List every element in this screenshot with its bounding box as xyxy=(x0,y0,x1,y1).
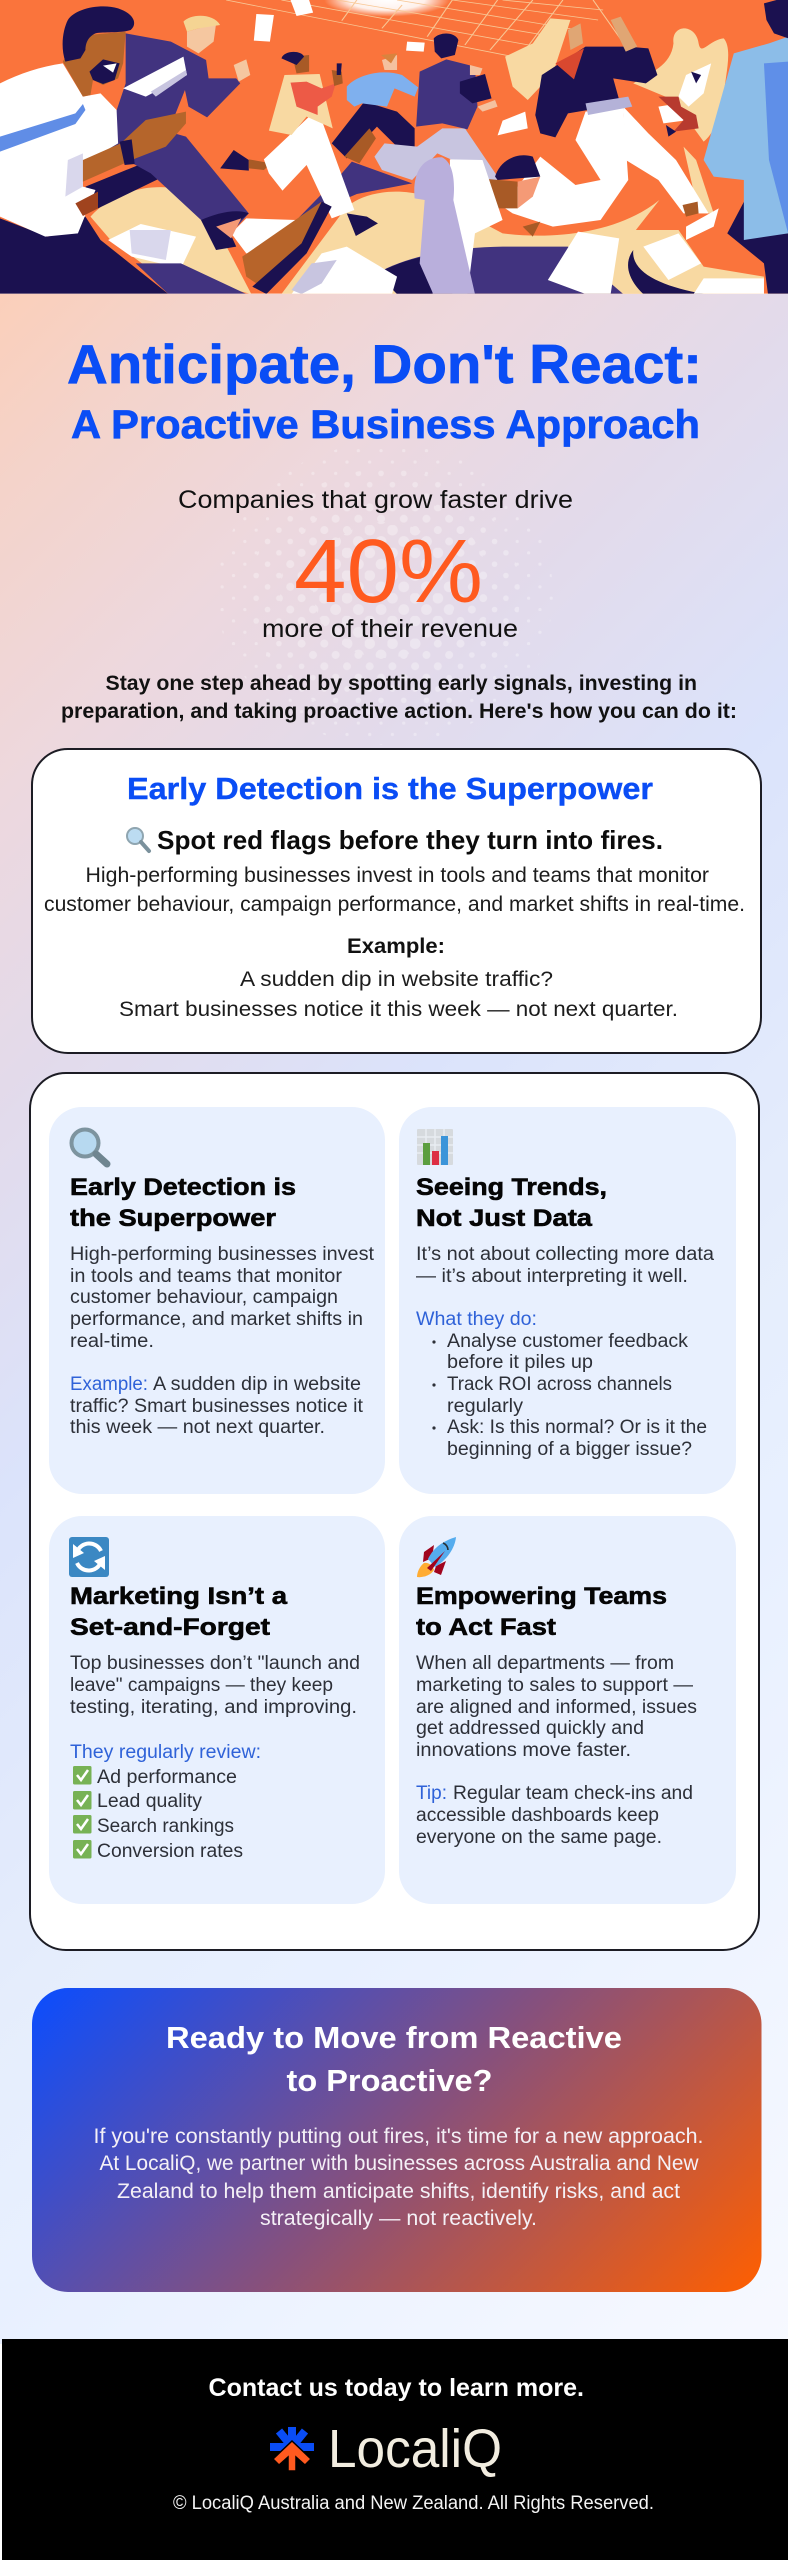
card text: real-time. xyxy=(70,1331,154,1352)
card text xyxy=(70,1653,360,1763)
card text: in tools and teams that monitor xyxy=(70,1266,343,1287)
white big shoe / lavender sole xyxy=(450,159,503,294)
intro text: preparation, and taking proactive action. Here's how you can do it: xyxy=(61,700,737,723)
bullet list: beginning of a bigger issue? xyxy=(447,1439,692,1460)
copyright: © LocaliQ Australia and New Zealand. All Rights Reserved. xyxy=(173,2493,654,2514)
card text: testing, iterating, and improving. xyxy=(70,1697,357,1718)
example xyxy=(119,935,678,1021)
logo: LocaliQ: LocaliQ xyxy=(328,2419,502,2479)
card text: performance, and market shifts in xyxy=(70,1309,363,1330)
icon: refresh arrows xyxy=(69,1537,109,1577)
card text: Tip: xyxy=(416,1783,447,1804)
card text: — it’s about interpreting it well. xyxy=(416,1266,688,1287)
card heading: Seeing Trends, xyxy=(416,1174,607,1201)
title xyxy=(67,333,702,447)
checklist: Conversion rates xyxy=(97,1841,243,1862)
card text: marketing to sales to support — xyxy=(416,1675,693,1696)
bullet list: Analyse customer feedback xyxy=(447,1331,689,1352)
card text: Regular team check-ins and xyxy=(453,1783,693,1804)
hero illustration: office workers running xyxy=(0,0,788,294)
card text: customer behaviour, campaign xyxy=(70,1287,338,1308)
card text: A sudden dip in website xyxy=(153,1374,361,1395)
card text xyxy=(70,1244,375,1438)
panel: call to action xyxy=(32,1988,762,2292)
contact line: Contact us today to learn more. xyxy=(208,2374,584,2402)
card text xyxy=(416,1653,697,1848)
intro text xyxy=(61,672,737,723)
card text: They regularly review: xyxy=(70,1742,261,1763)
card text xyxy=(416,1244,714,1330)
panel heading: Early Detection is the Superpower xyxy=(127,771,653,806)
call to action text: Zealand to help them anticipate shifts, identify risks, and act xyxy=(117,2180,680,2203)
sub heading: Spot red flags before they turn into fires. xyxy=(157,825,663,855)
card text: Top businesses don’t "launch and xyxy=(70,1653,360,1674)
blond woman xyxy=(505,18,570,100)
footer xyxy=(2,2339,788,2560)
statistic: 40% of revenue: 40% xyxy=(294,522,483,622)
example: Example: xyxy=(347,935,445,958)
card heading xyxy=(416,1583,667,1641)
checklist: Ad performance xyxy=(97,1767,237,1788)
panel: four proactive habits xyxy=(30,1073,759,1950)
runner blue top xyxy=(332,102,415,158)
far figure xyxy=(633,28,728,142)
card text: innovations move faster. xyxy=(416,1740,631,1761)
card: early detection xyxy=(49,1107,385,1494)
bullet list: Track ROI across channels xyxy=(447,1374,672,1395)
call to action text: If you're constantly putting out fires, it's time for a new approach. xyxy=(94,2125,704,2148)
man in white shirt xyxy=(0,217,168,294)
bullet list xyxy=(432,1331,707,1460)
card heading xyxy=(70,1583,287,1641)
card text: When all departments — from xyxy=(416,1653,674,1674)
man purple suit xyxy=(86,166,158,208)
right person in blue coat xyxy=(727,200,788,294)
example: A sudden dip in website traffic? xyxy=(240,968,553,991)
brown shoe xyxy=(242,202,328,283)
card text: High-performing businesses invest xyxy=(70,1244,375,1265)
icon: bar chart xyxy=(417,1129,453,1165)
card heading: Set-and-Forget xyxy=(70,1614,270,1641)
man with briefcase xyxy=(374,128,497,180)
bullet list: Ask: Is this normal? Or is it the xyxy=(447,1417,707,1438)
statistic: 40% of revenue xyxy=(178,486,573,643)
card heading: Empowering Teams xyxy=(416,1583,667,1610)
card heading: Not Just Data xyxy=(416,1205,592,1232)
panel: early detection summary xyxy=(32,749,761,1053)
card heading xyxy=(70,1174,296,1232)
card text: It’s not about collecting more data xyxy=(416,1244,714,1265)
card text: get addressed quickly and xyxy=(416,1718,644,1739)
card heading: Marketing Isn’t a xyxy=(70,1583,287,1610)
card: seeing trends xyxy=(399,1107,736,1494)
checklist: Lead quality xyxy=(97,1791,203,1812)
statistic: 40% of revenue: more of their revenue xyxy=(262,615,518,643)
call to action text: strategically — not reactively. xyxy=(260,2207,537,2230)
icon: rocket xyxy=(417,1537,456,1577)
example: Smart businesses notice it this week — not next quarter. xyxy=(119,998,678,1021)
card text: What they do: xyxy=(416,1309,537,1330)
card text: this week — not next quarter. xyxy=(70,1417,325,1438)
card: marketing xyxy=(49,1516,385,1904)
call to action heading: Ready to Move from Reactive xyxy=(166,2020,622,2055)
description xyxy=(44,864,745,916)
call to action text xyxy=(94,2125,704,2230)
call to action heading xyxy=(166,2020,622,2098)
card heading: the Superpower xyxy=(70,1205,277,1232)
card text: are aligned and informed, issues xyxy=(416,1697,697,1718)
icon: magnifying glass xyxy=(127,828,149,851)
card heading xyxy=(416,1174,607,1232)
halftone dot burst xyxy=(217,443,553,745)
floor shapes xyxy=(297,162,412,220)
card heading: to Act Fast xyxy=(416,1614,556,1641)
card text: leave" campaigns — they keep xyxy=(70,1675,333,1696)
checklist xyxy=(73,1766,243,1862)
bullet list: regularly xyxy=(447,1396,524,1417)
card text: Example: xyxy=(70,1374,148,1395)
checklist: Search rankings xyxy=(97,1816,234,1837)
card text: accessible dashboards keep xyxy=(416,1805,659,1826)
bullet list: before it piles up xyxy=(447,1352,593,1373)
call to action text: At LocaliQ, we partner with businesses across Australia and New xyxy=(100,2152,699,2175)
description: High-performing businesses invest in tools and teams that monitor xyxy=(86,864,709,887)
statistic: 40% of revenue: Companies that grow faster drive xyxy=(178,486,573,514)
title: A Proactive Business Approach xyxy=(71,403,700,447)
call to action heading: to Proactive? xyxy=(286,2063,492,2098)
card: empowering teams xyxy=(399,1516,736,1904)
title: Anticipate, Don't React: xyxy=(67,333,702,395)
woman with bag xyxy=(220,150,378,236)
description: customer behaviour, campaign performance, and market shifts in real-time. xyxy=(44,893,745,916)
icon: magnifying glass xyxy=(72,1130,107,1164)
card heading: Early Detection is xyxy=(70,1174,296,1201)
card text: everyone on the same page. xyxy=(416,1827,662,1848)
intro text: Stay one step ahead by spotting early signals, investing in xyxy=(106,672,697,695)
card text: traffic? Smart businesses notice it xyxy=(70,1396,364,1417)
